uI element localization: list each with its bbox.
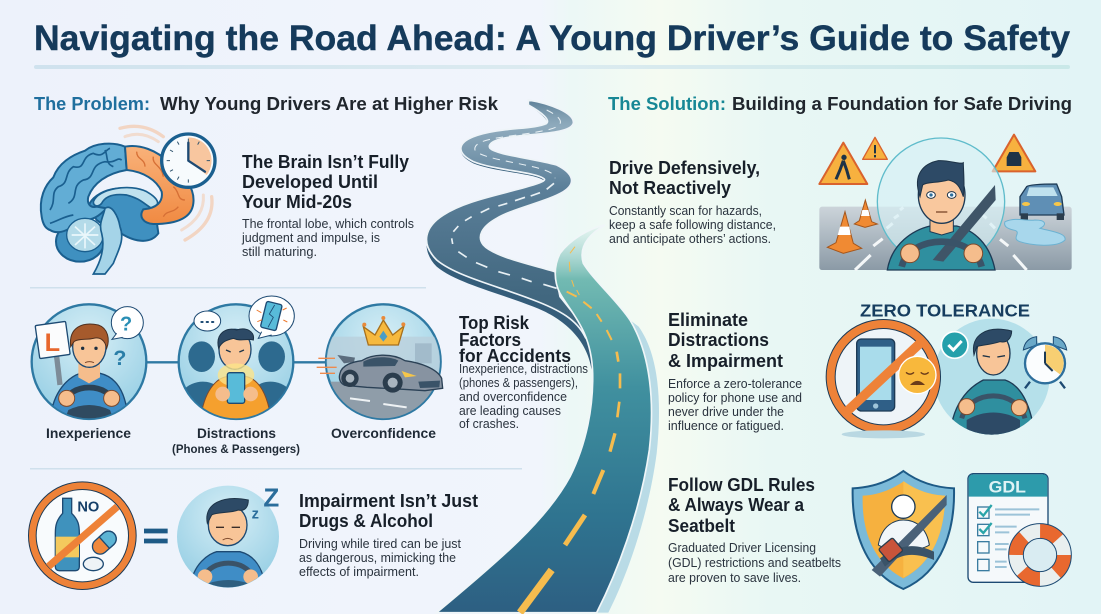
no phone sign	[830, 323, 937, 438]
icon: brain with clock	[41, 126, 215, 274]
sports car	[337, 355, 443, 393]
text block: eliminate distractions: Eliminate	[668, 310, 748, 330]
prohibition ring	[32, 486, 132, 586]
circle: distractions	[177, 296, 297, 423]
text block: eliminate distractions: & Impairment	[668, 351, 783, 371]
text block: brain: still maturing.	[242, 244, 317, 259]
road: yellow centre dashes	[520, 247, 620, 613]
section heading: problem: The Problem:	[34, 94, 150, 114]
text block: impairment: Drugs & Alcohol	[299, 511, 433, 531]
text block: impairment: Driving while tired can be just	[299, 536, 461, 551]
text block: impairment	[299, 491, 478, 579]
text block: drive defensively: Constantly scan for hazards,	[609, 203, 762, 218]
L plate sign: L	[45, 329, 60, 357]
section heading: solution: The Solution:	[608, 94, 726, 114]
text block: top risk factors: Inexperience, distractions	[459, 361, 588, 376]
text block: top risk factors	[459, 313, 588, 431]
road: upper dark section	[427, 100, 592, 370]
road: lighter shadow edge	[597, 320, 659, 613]
labels: inexperience, distractions, overconfidence: (Phones & Passengers)	[172, 442, 300, 456]
text block: top risk factors: for Accidents	[459, 346, 571, 366]
cerebellum	[67, 218, 103, 252]
puddle	[1005, 219, 1065, 245]
text block: GDL rules: Seatbelt	[668, 516, 735, 536]
brain blue cortex	[41, 144, 127, 232]
speech bubble question	[111, 307, 143, 370]
text block: GDL rules	[668, 475, 841, 585]
lane markings	[855, 207, 1027, 270]
bottle	[55, 498, 79, 571]
text block: GDL rules: are proven to save lives.	[668, 570, 801, 585]
shield with seatbelt	[853, 471, 954, 589]
title: Navigating the Road Ahead: A Young Driver’s Guide to Safety	[34, 19, 1071, 58]
divider	[30, 287, 426, 288]
road: lower teal section	[437, 225, 652, 613]
road: white dashes	[452, 110, 560, 288]
labels: inexperience, distractions, overconfidence	[46, 425, 436, 456]
glow arcs	[120, 126, 212, 240]
road panel	[819, 207, 1072, 270]
frontal folds	[137, 152, 185, 217]
tablet	[83, 557, 103, 571]
text block: drive defensively: Not Reactively	[609, 178, 731, 198]
text block: brain: The Brain Isn’t Fully	[242, 152, 409, 172]
crown	[362, 316, 405, 345]
text block: top risk factors: and overconfidence	[459, 389, 567, 404]
text block: GDL rules: Follow GDL Rules	[668, 475, 815, 495]
impairment equation	[32, 483, 279, 593]
brain stem	[93, 207, 122, 274]
text block: top risk factors: are leading causes	[459, 403, 561, 418]
bubble: cracked phone	[249, 296, 294, 338]
speech bubble question: ?	[120, 314, 132, 336]
illustration: zero tolerance	[830, 301, 1067, 438]
protective bubble	[877, 138, 1005, 265]
section heading: solution: Building a Foundation for Safe Driving	[732, 94, 1072, 114]
winding road	[427, 100, 659, 613]
text block: brain: Developed Until	[242, 172, 378, 192]
checklist card: GDL	[989, 477, 1026, 496]
speed lines	[317, 358, 337, 373]
sad emoji	[899, 356, 936, 394]
text block: brain: The frontal lobe, which controls	[242, 216, 414, 231]
traffic cones	[827, 200, 877, 253]
checklist card	[968, 474, 1048, 582]
text block: eliminate distractions: Enforce a zero-tolerance	[668, 376, 802, 391]
NO label: NO	[77, 500, 99, 516]
alarm clock	[1023, 337, 1067, 388]
cerebellum outer	[56, 222, 104, 262]
text block: top risk factors: (phones & passengers),	[459, 375, 578, 390]
speech bubble question: ?	[113, 346, 126, 370]
text block: brain: judgment and impulse, is	[241, 230, 380, 245]
text block: top risk factors: of crashes.	[459, 416, 519, 431]
text block: brain: Your Mid-20s	[242, 192, 352, 212]
text block: eliminate distractions: never drive under the	[668, 404, 784, 419]
text block: top risk factors: Top Risk	[459, 313, 530, 333]
subcortex	[88, 188, 158, 241]
drowsy driver in circle	[934, 319, 1050, 435]
text block: drive defensively: and anticipate others’ actions.	[609, 231, 771, 246]
text block: impairment: effects of impairment.	[299, 564, 419, 579]
divider	[30, 468, 522, 470]
frontal lobe orange	[125, 146, 194, 224]
circle: inexperience	[32, 304, 146, 423]
text block: eliminate distractions: influence or fatigued.	[668, 418, 784, 433]
gyri folds	[50, 148, 122, 223]
illustration: defensive driver in bubble	[819, 135, 1072, 270]
text block: GDL rules: (GDL) restrictions and seatbelts	[668, 555, 841, 570]
labels: inexperience, distractions, overconfidence: Overconfidence	[331, 425, 436, 441]
text block: impairment: as dangerous, mimicking the	[299, 550, 456, 565]
icon: tired driver: z	[252, 506, 259, 522]
illustration: shield and GDL checklist	[853, 471, 1071, 589]
text block: drive defensively: keep a safe following distance,	[609, 217, 776, 232]
car ahead	[1020, 184, 1064, 220]
text block: brain	[241, 152, 414, 259]
icon: tired driver	[177, 483, 279, 593]
text block: eliminate distractions: policy for phone use and	[668, 390, 802, 405]
labels: inexperience, distractions, overconfidence: Distractions	[197, 425, 276, 441]
labels: inexperience, distractions, overconfidence: Inexperience	[46, 425, 131, 441]
warning signs	[819, 135, 1035, 184]
sleep Zs: Z	[263, 483, 279, 513]
text block: eliminate distractions: Distractions	[668, 330, 769, 350]
corpus callosum arc	[93, 188, 158, 208]
section heading: problem	[34, 94, 499, 114]
equals sign	[144, 531, 168, 541]
text block: GDL rules: & Always Wear a	[668, 495, 805, 515]
text block: drive defensively: Drive Defensively,	[609, 158, 760, 178]
text block: drive defensively	[609, 158, 776, 246]
text block: impairment: Impairment Isn’t Just	[299, 491, 478, 511]
heading: zero tolerance: ZERO TOLERANCE	[860, 301, 1030, 321]
life ring	[1009, 524, 1071, 586]
text block: eliminate distractions	[668, 310, 802, 433]
driver	[887, 161, 996, 270]
clock	[162, 134, 215, 187]
pill	[89, 528, 119, 557]
bubble: chat	[194, 311, 221, 331]
check badge	[941, 332, 968, 358]
connector lines	[147, 359, 328, 366]
icon: no alcohol or drugs	[32, 486, 132, 586]
text block: GDL rules: Graduated Driver Licensing	[668, 540, 816, 555]
text block: top risk factors: Factors	[459, 330, 521, 350]
risk factor circles row	[32, 296, 443, 423]
circle: overconfidence	[317, 304, 443, 422]
section heading: problem: Why Young Drivers Are at Higher Risk	[160, 94, 499, 114]
